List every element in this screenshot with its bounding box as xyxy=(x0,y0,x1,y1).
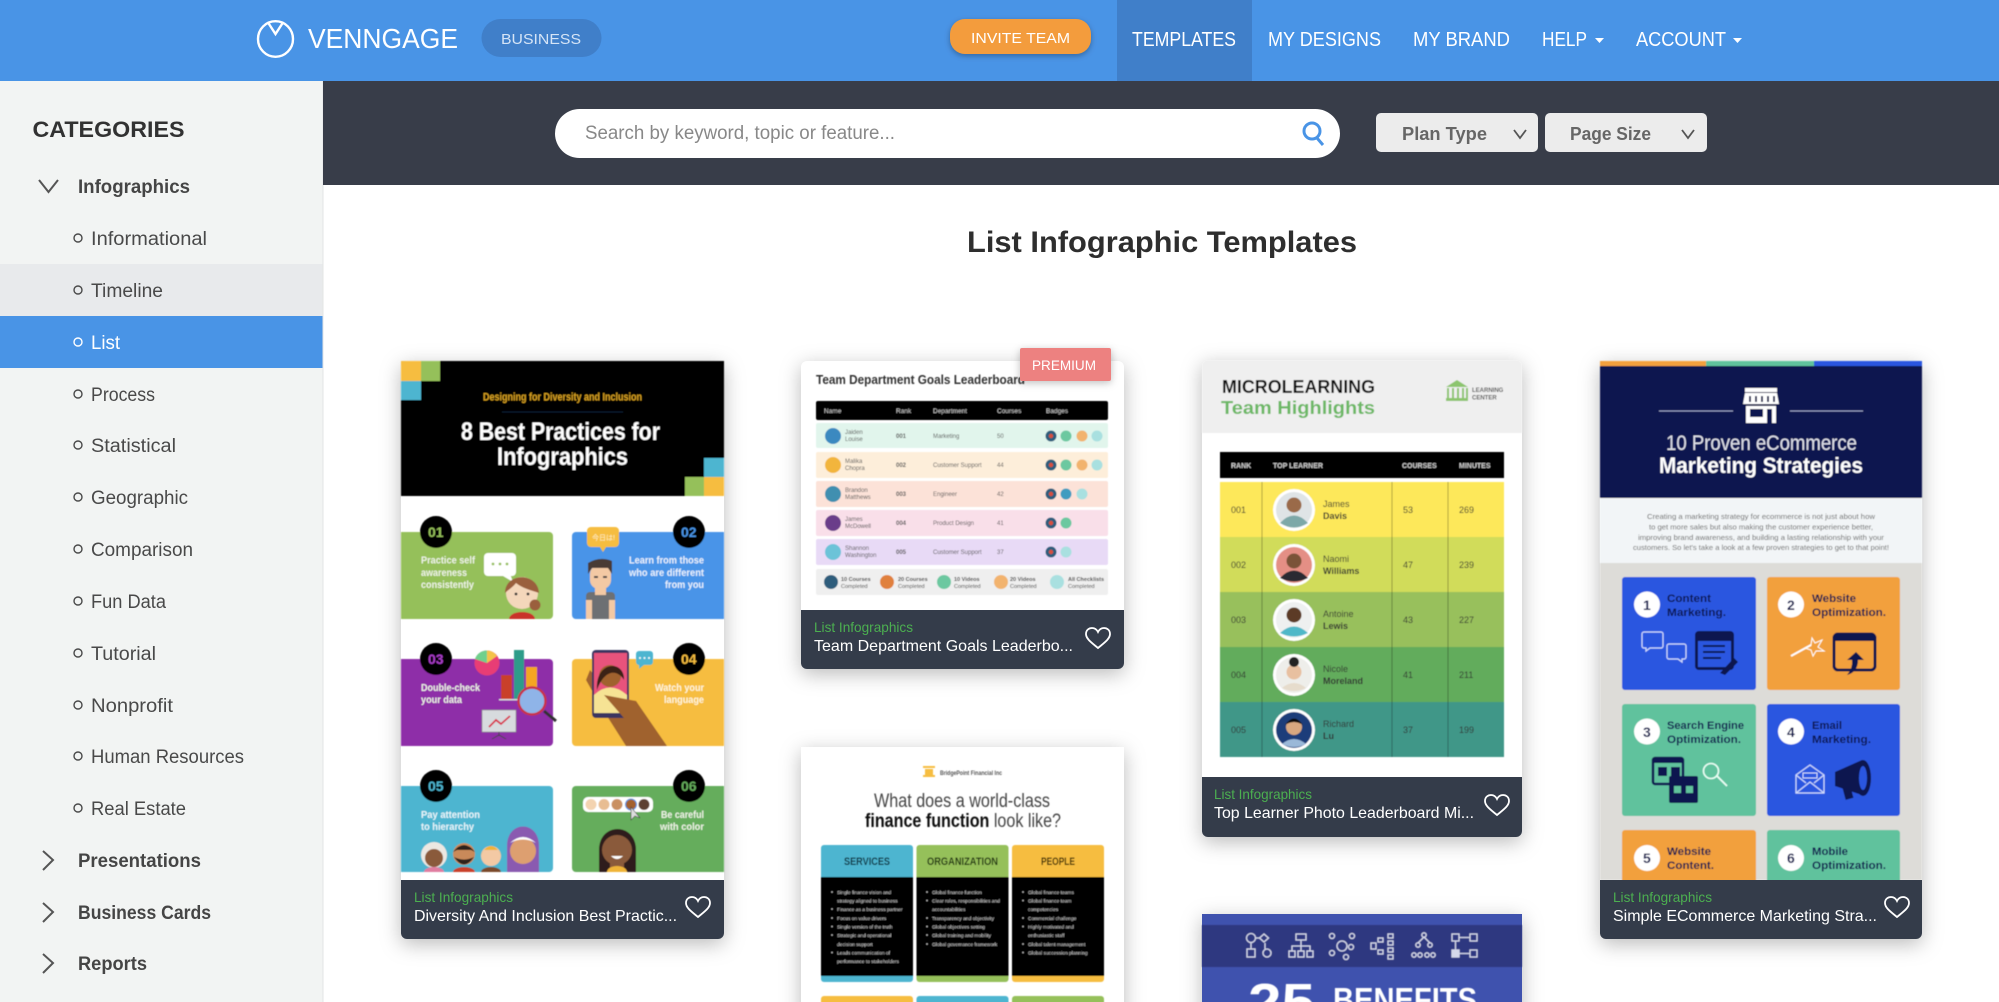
thumbnail: ecommerce marketing: Marketing. xyxy=(1812,734,1871,746)
thumbnail: ecommerce marketing: 10 Proven eCommerce xyxy=(1666,432,1857,455)
page title: List Infographic Templates xyxy=(967,226,1357,259)
thumbnail: microlearning team highlights: RANK xyxy=(1231,463,1251,470)
panel 05 xyxy=(401,786,553,872)
thumbnail: microlearning team highlights: 199 xyxy=(1459,725,1474,735)
thumbnail: ecommerce marketing: 5 xyxy=(1643,850,1651,866)
sidebar: categories xyxy=(0,81,324,1002)
thumbnail: leaderboard table: 20 Videos xyxy=(1010,577,1036,583)
thumbnail: leaderboard table: 42 xyxy=(997,492,1004,498)
thumbnail: finance function columns: Global training and mobility xyxy=(932,933,992,939)
thumbnail: microlearning team highlights: 269 xyxy=(1459,505,1474,515)
thumbnail: ecommerce marketing: Mobile xyxy=(1812,846,1848,858)
thumbnail: leaderboard table: 002 xyxy=(896,463,907,469)
thumbnail: leaderboard table: Shannon xyxy=(845,546,869,552)
thumbnail: finance function columns: SERVICES xyxy=(844,856,890,868)
thumbnail: finance function columns: Single finance vision and xyxy=(837,890,891,896)
thumbnail: leaderboard table: Courses xyxy=(997,408,1022,415)
thumbnail: finance function columns: performance to stakeholders xyxy=(837,959,900,965)
caption: List Infographics xyxy=(814,619,913,635)
thumbnail: finance function columns: Clear roles, responsibilities and xyxy=(932,898,1000,904)
thumbnail: leaderboard table: 004 xyxy=(896,521,907,527)
subcategory list xyxy=(74,229,244,820)
thumbnail: microlearning team highlights: 227 xyxy=(1459,615,1474,625)
thumbnail: ecommerce marketing: improving brand awareness, and building a lasting relationship with your xyxy=(1638,533,1885,542)
thumbnail: finance function columns: PEOPLE xyxy=(1041,856,1075,868)
filter: page size xyxy=(1545,113,1707,152)
panel 01: awareness xyxy=(421,567,467,579)
number badges: 05 xyxy=(428,778,444,794)
panel 04 xyxy=(572,650,724,746)
thumbnail: microlearning team highlights: Team Highlights xyxy=(1221,398,1375,418)
thumbnail: finance function columns xyxy=(821,766,1104,1002)
thumbnail: ecommerce marketing: 6 xyxy=(1787,850,1795,866)
thumbnail: finance function columns: accountabilities xyxy=(932,907,966,913)
thumbnail: finance function columns: Global governance framework xyxy=(932,942,998,948)
thumbnail: leaderboard table: Marketing xyxy=(933,434,959,440)
subcategory list: Comparison xyxy=(91,540,193,561)
icon: envelope and megaphone xyxy=(1796,760,1871,800)
thumbnail: finance function columns: finance function look like? xyxy=(865,811,1061,832)
caption: Simple ECommerce Marketing Stra... xyxy=(1613,908,1877,925)
subcategory list: Tutorial xyxy=(91,644,156,665)
panel 06: with color xyxy=(659,821,704,833)
thumbnail: ecommerce marketing: Website xyxy=(1667,846,1711,858)
thumbnail: leaderboard table: Rank xyxy=(896,408,912,415)
thumbnail: finance function columns: Finance as a business partner xyxy=(837,907,903,913)
active tab: templates: TEMPLATES xyxy=(1132,29,1236,51)
thumbnail: leaderboard table: Washington xyxy=(845,553,876,559)
thumbnail: ecommerce marketing: customers. So let's take a look at a few proven strategies to get to that point! xyxy=(1633,543,1889,552)
panel 02: from you xyxy=(665,579,704,591)
thumbnail: leaderboard table: McDowell xyxy=(845,524,871,530)
category: infographics: Infographics xyxy=(78,177,190,198)
thumbnail: microlearning team highlights: 43 xyxy=(1403,615,1413,625)
thumbnail: 8 best practices xyxy=(401,361,724,872)
thumbnail: leaderboard table: James xyxy=(845,517,863,523)
thumbnail: ecommerce marketing xyxy=(1600,361,1922,890)
thumbnail: microlearning team highlights: 004 xyxy=(1231,670,1246,680)
filter: plan type: Plan Type xyxy=(1402,124,1487,144)
thumbnail: finance function columns: ORGANIZATION xyxy=(927,856,998,868)
thumbnail: finance function columns: decision support xyxy=(837,942,873,948)
thumbnail: finance function columns: Highly motivated and xyxy=(1028,924,1074,930)
premium badge xyxy=(1020,348,1111,381)
invite team button xyxy=(950,19,1091,54)
thumbnail: leaderboard table: Completed xyxy=(1068,584,1095,590)
thumbnail: microlearning team highlights: MINUTES xyxy=(1459,463,1491,470)
icon: chat and document xyxy=(1642,631,1738,675)
thumbnail: microlearning team highlights xyxy=(1202,360,1522,757)
panel 06 xyxy=(572,786,724,872)
panel 06: Be careful xyxy=(661,809,704,821)
category: reports: Reports xyxy=(78,954,147,975)
thumbnail: leaderboard table: Malika xyxy=(845,459,863,465)
thumbnail: 8 best practices: 8 Best Practices for xyxy=(461,418,660,446)
subcategory list: Real Estate xyxy=(91,799,186,820)
panel 05: to hierarchy xyxy=(421,821,474,833)
thumbnail: microlearning team highlights: Richard xyxy=(1323,719,1354,729)
thumbnail: microlearning team highlights: 47 xyxy=(1403,560,1413,570)
thumbnail: finance function columns: Global finance team xyxy=(1028,898,1072,904)
panel 03 xyxy=(401,650,556,746)
thumbnail: finance function columns: Global finance function xyxy=(932,890,982,896)
thumbnail: leaderboard table: 001 xyxy=(896,434,907,440)
thumbnail: microlearning team highlights: Naomi xyxy=(1323,554,1349,564)
number badges: 02 xyxy=(681,524,697,540)
number badges: 04 xyxy=(681,651,697,667)
thumbnail: leaderboard table: 44 xyxy=(997,463,1004,469)
thumbnail: leaderboard table xyxy=(816,372,1108,595)
thumbnail: microlearning team highlights: COURSES xyxy=(1402,463,1437,470)
thumbnail: leaderboard table: 50 xyxy=(997,434,1004,440)
panel 01 xyxy=(401,532,553,619)
card: world-class finance function xyxy=(801,747,1124,1002)
thumbnail: ecommerce marketing: Website xyxy=(1812,593,1856,605)
caption: List Infographics xyxy=(414,889,513,905)
subcategory list: Process xyxy=(91,385,155,406)
thumbnail: leaderboard table: All Checklists xyxy=(1068,577,1104,583)
thumbnail: finance function columns: Global talent management xyxy=(1028,942,1086,948)
subcategory list: Nonprofit xyxy=(91,696,174,717)
thumbnail: leaderboard table: Completed xyxy=(954,584,981,590)
thumbnail: ecommerce marketing: Content xyxy=(1667,593,1711,605)
sidebar heading: CATEGORIES xyxy=(32,117,184,142)
thumbnail: ecommerce marketing: to get more sales but also making the customer experience better, xyxy=(1649,522,1873,532)
thumbnail: microlearning team highlights: Williams xyxy=(1323,566,1359,576)
thumbnail: leaderboard table: Matthews xyxy=(845,495,871,501)
subcategory list: Fun Data xyxy=(91,592,166,613)
panel 02 xyxy=(572,527,724,619)
thumbnail: microlearning team highlights: Davis xyxy=(1323,511,1347,521)
search input: Search by keyword, topic or feature... xyxy=(585,123,895,144)
caption: List Infographics xyxy=(1613,889,1712,905)
nav link: my brand: MY BRAND xyxy=(1413,29,1510,51)
thumbnail: ecommerce marketing: Optimization. xyxy=(1812,607,1886,619)
thumbnail: leaderboard table: 37 xyxy=(997,550,1004,556)
thumbnail: benefits header xyxy=(1202,925,1522,1002)
number badges: 01 xyxy=(428,524,444,540)
thumbnail: leaderboard table: Department xyxy=(933,408,967,415)
number badges xyxy=(420,516,705,802)
active tab: templates xyxy=(1117,0,1252,81)
thumbnail: ecommerce marketing: Creating a marketing strategy for ecommerce is not just about how xyxy=(1647,512,1876,521)
icon: search xyxy=(1304,123,1323,145)
thumbnail: microlearning team highlights: LEARNING xyxy=(1472,388,1504,394)
panel 03: your data xyxy=(421,694,462,706)
premium badge: PREMIUM xyxy=(1032,357,1096,373)
card: diversity and inclusion xyxy=(401,361,724,939)
thumbnail: ecommerce marketing: 3 xyxy=(1643,724,1651,740)
top navigation bar xyxy=(0,0,1999,81)
icon: wand and window xyxy=(1791,634,1875,675)
thumbnail: microlearning team highlights: Antoine xyxy=(1323,609,1354,619)
panel 02: 今日は! xyxy=(592,533,615,542)
thumbnail: microlearning team highlights: MICROLEARNING xyxy=(1222,377,1375,397)
item highlight: list xyxy=(0,316,322,368)
thumbnail: microlearning team highlights: Nicole xyxy=(1323,664,1348,674)
thumbnail: finance function columns: Focus on value drivers xyxy=(837,916,887,922)
filter: plan type xyxy=(1376,113,1538,152)
icon: windows and magnifier xyxy=(1653,758,1727,803)
icon: venngage logo xyxy=(258,21,293,57)
panel 02: who are different xyxy=(628,567,704,579)
thumbnail: leaderboard table: Completed xyxy=(1010,584,1037,590)
thumbnail: ecommerce marketing: 4 xyxy=(1787,724,1795,740)
thumbnail: ecommerce marketing: Content. xyxy=(1667,860,1714,872)
category: presentations: Presentations xyxy=(78,851,201,872)
panel 04: language xyxy=(664,694,704,706)
category: business cards: Business Cards xyxy=(78,903,211,924)
thumbnail: finance function columns: competencies xyxy=(1028,907,1059,913)
brand name: VENNGAGE xyxy=(308,23,458,54)
thumbnail: leaderboard table: Brandon xyxy=(845,488,868,494)
thumbnail: microlearning team highlights: 003 xyxy=(1231,615,1246,625)
thumbnail: ecommerce marketing: Optimization. xyxy=(1667,734,1741,746)
invite team button: INVITE TEAM xyxy=(971,30,1070,47)
thumbnail: leaderboard table: Louise xyxy=(845,437,863,443)
icon: storefront xyxy=(1743,388,1779,423)
thumbnail: finance function columns: Leads communication of xyxy=(837,950,891,956)
thumbnail: ecommerce marketing: Search Engine xyxy=(1667,720,1744,732)
thumbnail: microlearning team highlights: TOP LEARNER xyxy=(1273,463,1323,470)
card: top learner photo leaderboard xyxy=(1202,360,1522,837)
panel 01: Practice self xyxy=(421,554,475,566)
caption: Diversity And Inclusion Best Practic... xyxy=(414,908,677,925)
subcategory list: Geographic xyxy=(91,488,188,509)
nav link: my designs: MY DESIGNS xyxy=(1268,29,1381,51)
caption: List Infographics xyxy=(1214,786,1312,802)
business badge: BUSINESS xyxy=(501,31,581,48)
search bar panel xyxy=(323,81,1999,185)
caption xyxy=(1202,777,1522,837)
thumbnail: finance function columns: Single version of the truth xyxy=(837,924,893,930)
thumbnail: microlearning team highlights: 005 xyxy=(1231,725,1246,735)
thumbnail: microlearning team highlights: Moreland xyxy=(1323,676,1363,686)
thumbnail: ecommerce marketing: Marketing Strategies xyxy=(1659,453,1863,478)
thumbnail: finance function columns: Transparency and objectivity xyxy=(932,916,995,922)
filter: page size: Page Size xyxy=(1570,124,1651,144)
panel 01: consistently xyxy=(421,579,474,591)
thumbnail: leaderboard table: Engineer xyxy=(933,492,957,498)
nav link: help: HELP xyxy=(1542,29,1587,51)
card: team department goals leaderboard xyxy=(801,348,1124,669)
thumbnail: leaderboard table: Chopra xyxy=(845,466,865,472)
subcategory list: List xyxy=(91,333,121,354)
caption: Team Department Goals Leaderbo... xyxy=(814,638,1073,655)
thumbnail: leaderboard table: Jaiden xyxy=(845,430,863,436)
subcategory list: Informational xyxy=(91,229,207,250)
caption xyxy=(1600,880,1922,939)
thumbnail: finance function columns: Global finance teams xyxy=(1028,890,1074,896)
card: simple ecommerce marketing strategies xyxy=(1600,361,1922,939)
thumbnail: leaderboard table: 10 Videos xyxy=(954,577,980,583)
thumbnail: finance function columns: strategy aligned to business xyxy=(837,898,898,904)
thumbnail: leaderboard table: 003 xyxy=(896,492,907,498)
thumbnail: finance function columns: Commercial challenge xyxy=(1028,916,1077,922)
thumbnail: leaderboard table: Completed xyxy=(898,584,925,590)
thumbnail: leaderboard table: Name xyxy=(824,408,842,415)
caption xyxy=(801,610,1124,669)
caption xyxy=(401,880,724,939)
nav link: account: ACCOUNT xyxy=(1636,29,1726,51)
panel 03: Double-check xyxy=(421,682,480,694)
thumbnail: leaderboard table: Customer Support xyxy=(933,550,982,556)
diagram icons row xyxy=(1246,933,1477,960)
thumbnail: ecommerce marketing: 1 xyxy=(1643,597,1651,613)
thumbnail: leaderboard table: Team Department Goals Leaderboard xyxy=(816,372,1025,387)
search input xyxy=(555,109,1340,158)
thumbnail: microlearning team highlights: 001 xyxy=(1231,505,1246,515)
thumbnail: microlearning team highlights: 37 xyxy=(1403,725,1413,735)
number badges: 03 xyxy=(428,651,444,667)
thumbnail: microlearning team highlights: 41 xyxy=(1403,670,1413,680)
thumbnail: microlearning team highlights: James xyxy=(1323,499,1350,509)
business badge xyxy=(482,19,602,57)
subcategory list: Human Resources xyxy=(91,747,244,768)
thumbnail: microlearning team highlights: 53 xyxy=(1403,505,1413,515)
thumbnail: 8 best practices: Infographics xyxy=(497,443,628,471)
thumbnail: finance function columns: Strategic and operational xyxy=(837,933,891,939)
thumbnail: leaderboard table: 41 xyxy=(997,521,1004,527)
thumbnail: microlearning team highlights: 002 xyxy=(1231,560,1246,570)
panel 04: Watch your xyxy=(655,682,704,694)
thumbnail: finance function columns: What does a world-class xyxy=(874,791,1050,812)
panel 05: Pay attention xyxy=(421,809,480,821)
thumbnail: 8 best practices: Designing for Diversity and Inclusion xyxy=(483,392,642,404)
thumbnail: leaderboard table: 005 xyxy=(896,550,907,556)
caption: Top Learner Photo Leaderboard Mi... xyxy=(1214,805,1474,822)
item highlight: timeline xyxy=(0,264,322,316)
thumbnail: leaderboard table: Customer Support xyxy=(933,463,982,469)
thumbnail: finance function columns: BridgePoint Financial Inc xyxy=(940,771,1003,777)
category: reports xyxy=(43,954,147,975)
thumbnail: ecommerce marketing: Optimization. xyxy=(1812,860,1886,872)
number badges: 06 xyxy=(681,778,697,794)
subcategory list: Statistical xyxy=(91,436,176,457)
subcategory list: Timeline xyxy=(91,281,163,302)
thumbnail: ecommerce marketing: 2 xyxy=(1787,597,1795,613)
thumbnail: finance function columns: Global objectives setting xyxy=(932,924,985,930)
panel 02: Learn from those xyxy=(629,554,704,566)
thumbnail: leaderboard table: 20 Courses xyxy=(898,577,928,583)
thumbnail: leaderboard table: Completed xyxy=(841,584,868,590)
thumbnail: microlearning team highlights: CENTER xyxy=(1472,396,1497,402)
card: 25 benefits xyxy=(1202,914,1522,1002)
thumbnail: microlearning team highlights: 239 xyxy=(1459,560,1474,570)
thumbnail: finance function columns: Global succession planning xyxy=(1028,950,1088,956)
thumbnail: microlearning team highlights: 211 xyxy=(1459,670,1473,680)
thumbnail: leaderboard table: Product Design xyxy=(933,521,974,527)
thumbnail: ecommerce marketing: Email xyxy=(1812,720,1842,732)
thumbnail: microlearning team highlights: Lu xyxy=(1323,731,1334,741)
thumbnail: microlearning team highlights: Lewis xyxy=(1323,621,1348,631)
thumbnail: leaderboard table: Badges xyxy=(1046,408,1069,415)
thumbnail: ecommerce marketing: Marketing. xyxy=(1667,607,1726,619)
thumbnail: finance function columns: enthusiastic staff xyxy=(1028,933,1065,939)
thumbnail: leaderboard table: 10 Courses xyxy=(841,577,871,583)
